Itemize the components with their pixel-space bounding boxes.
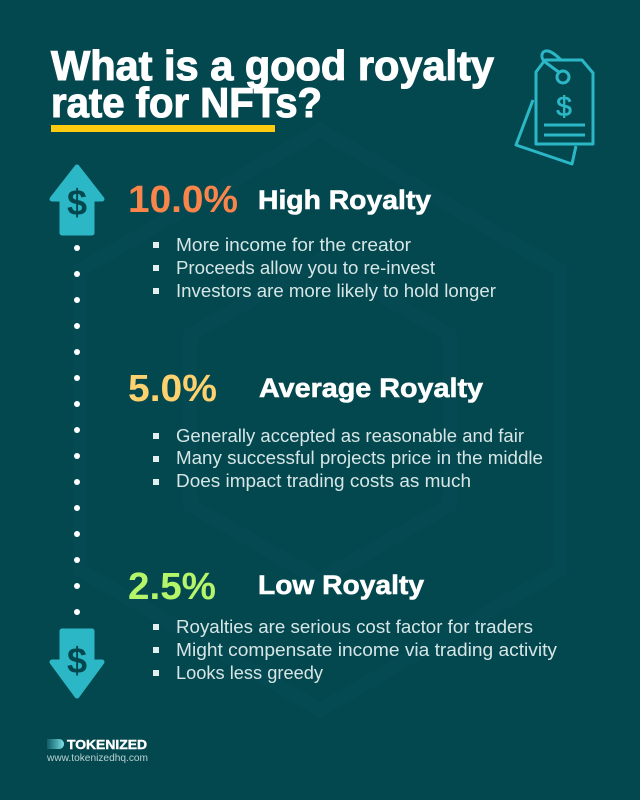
section: high royalty: Investors are more likely to hold longer: [176, 281, 496, 301]
section: high royalty: High Royalty: [258, 185, 431, 215]
footer logo and url: TOKENIZED: [67, 737, 147, 752]
section: high royalty: 10.0%: [128, 179, 238, 221]
icon: down arrow with dollar: [52, 631, 102, 696]
title: rate for NFTs?: [51, 79, 322, 126]
icon: down arrow with dollar: $: [67, 640, 87, 681]
title underline: [51, 125, 275, 132]
section: low royalty: Royalties are serious cost factor for traders: [176, 617, 533, 637]
icon: price tags: $: [556, 91, 572, 122]
section: low royalty: Looks less greedy: [176, 663, 323, 683]
section: low royalty: [128, 566, 557, 683]
section: average royalty: Does impact trading costs as much: [176, 471, 471, 491]
section: average royalty: Average Royalty: [259, 373, 483, 403]
section: high royalty: Proceeds allow you to re-invest: [176, 258, 435, 278]
icon: price tags: [516, 51, 593, 164]
section: average royalty: [128, 368, 543, 491]
section: high royalty: More income for the creator: [176, 235, 411, 255]
dotted connector: [74, 245, 80, 615]
title: [51, 42, 495, 126]
section: low royalty: Might compensate income via trading activity: [176, 640, 557, 660]
section: low royalty: 2.5%: [128, 566, 216, 608]
footer logo and url: [46, 737, 148, 764]
section: low royalty: Low Royalty: [258, 570, 424, 600]
icon: up arrow with dollar: $: [67, 182, 87, 223]
section: average royalty: Many successful projects price in the middle: [176, 448, 543, 468]
icon: up arrow with dollar: [52, 167, 102, 233]
section: average royalty: 5.0%: [128, 368, 217, 410]
footer logo and url: www.tokenizedhq.com: [46, 752, 148, 764]
section: average royalty: Generally accepted as reasonable and fair: [176, 426, 524, 446]
title: What is a good royalty: [51, 42, 495, 89]
section: high royalty: [128, 179, 496, 301]
